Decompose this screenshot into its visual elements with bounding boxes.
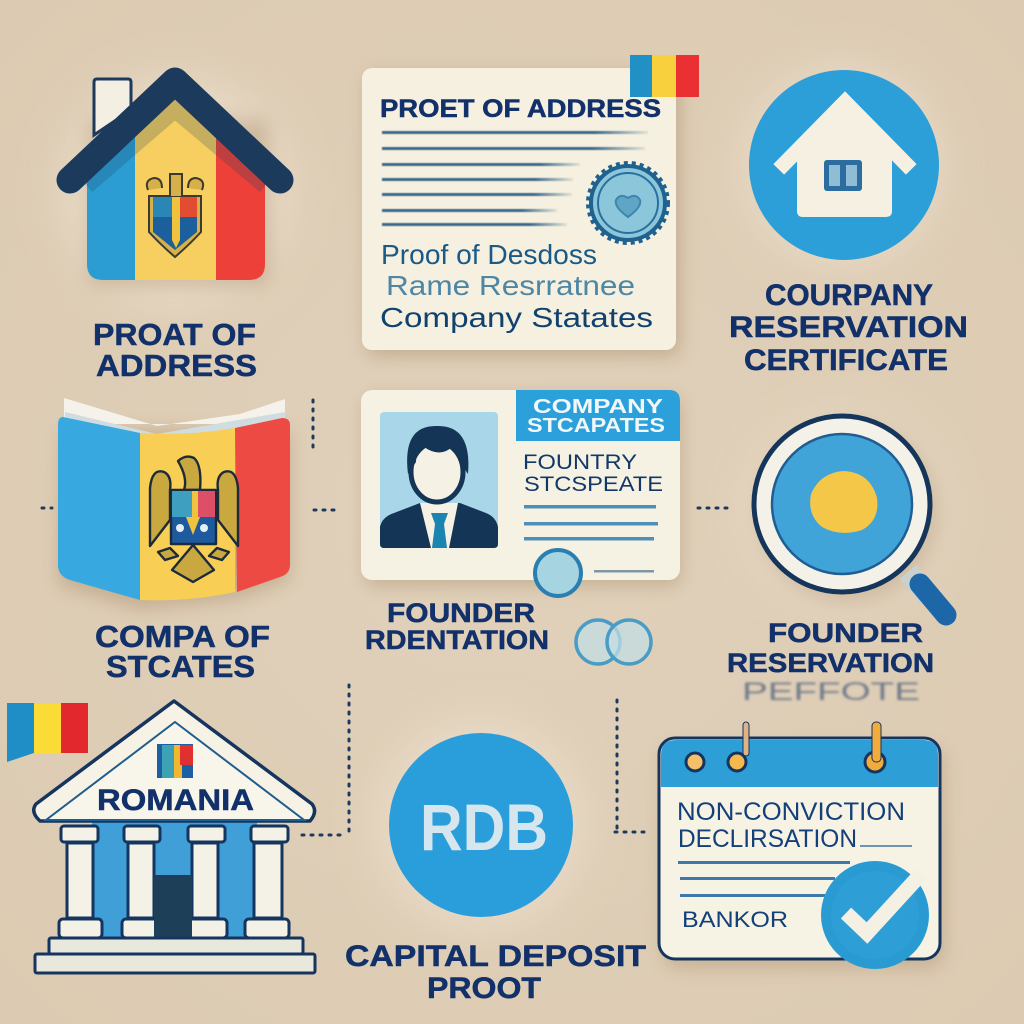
icon: portrait [380, 412, 498, 548]
text block: document details: Rame Resrratnee [386, 270, 635, 301]
text block: document details: Company Statates [380, 302, 653, 333]
icon: flag [630, 55, 699, 97]
icon: seal [588, 163, 668, 243]
icon: blue circle house [749, 70, 939, 260]
heading: courpany reservation certificate: RESERVATION [729, 311, 968, 344]
door [154, 875, 192, 938]
header: company statutes: STCAPATES [527, 415, 665, 437]
text block: document details: Proof of Desdoss [381, 239, 597, 270]
header: company statutes [516, 390, 680, 441]
text block: founty stcsteate [523, 451, 663, 496]
icon: house in Romanian colours [70, 79, 280, 285]
icon: card seal [535, 550, 581, 596]
label: bankor: BANKOR [682, 907, 788, 932]
heading: founder reservation pe fote [727, 618, 934, 706]
heading: founder reservation pe fote: PEFFOTE [742, 678, 920, 706]
heading: proat of address: ADDRESS [96, 348, 257, 383]
header: company statutes: COMPANY [533, 396, 664, 418]
heading: founder reservation pe fote: RESERVATION [727, 648, 934, 678]
icon: rdb circle: RDB [420, 790, 548, 864]
heading: proet of address: PROET OF ADDRESS [380, 95, 661, 123]
heading: capital deposit proot: PROOT [427, 972, 541, 1005]
icon: building [34, 701, 315, 973]
panel: company reservation certificate [729, 70, 968, 377]
calendar lines [678, 845, 912, 897]
text block: non-conviction declaration [677, 798, 905, 853]
panel: non-conviction declaration calendar [659, 722, 944, 969]
icon: magnifying glass [754, 416, 946, 615]
document lines [382, 131, 648, 226]
heading: capital deposit proot [345, 940, 646, 1005]
panel: capital deposit proof [345, 733, 646, 1005]
text block: document details [380, 239, 653, 333]
text block: non-conviction declaration: NON-CONVICTION [677, 798, 905, 826]
label: romania: ROMANIA [97, 784, 254, 817]
panel: company statutes book [58, 398, 290, 684]
icon: check badge [821, 861, 929, 969]
heading: founder rdentation [365, 598, 549, 655]
icon: book with flag cover [58, 398, 290, 610]
heading: proat of address [93, 317, 257, 383]
icon: rdb circle [389, 733, 573, 917]
text block: founty stcsteate: FOUNTRY [523, 451, 637, 474]
panel: proof of address document [362, 55, 699, 356]
panel: romania bank building [7, 701, 315, 973]
heading: compa of stcates: COMPA OF [95, 619, 270, 654]
heading: courpany reservation certificate: COURPANY [765, 279, 933, 312]
icon: coat of arms [147, 174, 203, 257]
panel: proof of address house [70, 79, 280, 383]
steps [35, 938, 315, 973]
panel: founder reservation [727, 416, 946, 706]
heading: proat of address: PROAT OF [93, 317, 256, 352]
columns [59, 826, 289, 938]
heading: founder rdentation: FOUNDER [387, 598, 535, 628]
icon: small crest [157, 744, 193, 778]
heading: compa of stcates: STCATES [106, 649, 255, 684]
heading: compa of stcates [95, 619, 270, 684]
text block: non-conviction declaration: DECLIRSATION [678, 825, 857, 853]
heading: founder reservation pe fote: FOUNDER [768, 618, 923, 648]
heading: courpany reservation certificate: CERTIFICATE [744, 344, 948, 377]
text block: founty stcsteate: STCSPEATE [524, 473, 663, 496]
card lines [524, 505, 658, 572]
heading: courpany reservation certificate [729, 279, 968, 377]
icon: double circle [576, 620, 651, 664]
icon: flag [7, 703, 88, 762]
heading: founder rdentation: RDENTATION [365, 625, 549, 655]
calendar header [661, 740, 938, 787]
icon: binder rings [686, 722, 885, 772]
icon: coat of arms eagle [150, 457, 238, 582]
heading: capital deposit proot: CAPITAL DEPOSIT [345, 940, 646, 973]
panel: founder id card [361, 390, 681, 664]
